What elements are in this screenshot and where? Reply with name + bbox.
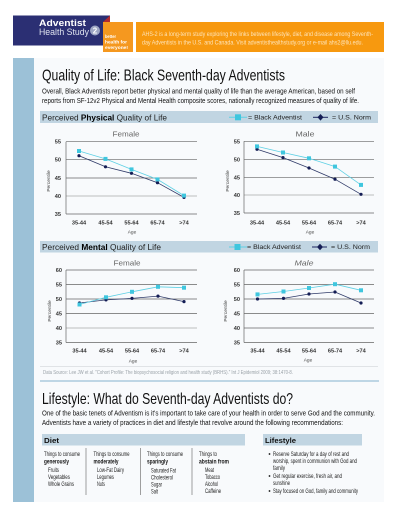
line chart: physical male: >74	[356, 220, 367, 226]
logo: Adventist Health Study 2: Health Study	[39, 27, 89, 37]
diet column: sparingly: Saturated Fat	[151, 468, 176, 474]
line chart: mental male: >74	[356, 348, 367, 354]
logo: Adventist Health Study 2: 2	[93, 26, 98, 36]
diet column: moderately: Things to consume	[94, 451, 130, 458]
line chart: physical male: 45-54	[276, 220, 291, 226]
line chart: physical male: Percentile	[225, 170, 231, 192]
line chart: mental female: 35-44	[72, 348, 88, 354]
line chart: mental female: Percentile	[47, 300, 53, 322]
line chart: mental female: 60	[56, 268, 62, 274]
section band: perceived physical quality of life: = U.S. Norm	[332, 116, 371, 122]
logo: Adventist Health Study 2: better	[105, 34, 116, 39]
section band: perceived physical quality of life: Perceived Physical Quality of Life	[42, 114, 168, 122]
line chart: physical female: >74	[179, 220, 190, 226]
diet column: abstain: Alcohol	[205, 481, 218, 488]
line chart: physical female: Age	[128, 230, 137, 236]
line chart: physical male: 55	[234, 139, 240, 145]
panel: lifestyle: Lifestyle	[265, 436, 296, 445]
source note: Data Source: Lee JW et al. "Cohort Profile: The biopsychosocial religion and health study (BRHS)." Int J Epidemiol 2009; 38:1470-8.	[43, 370, 293, 376]
line chart: mental female: Age	[129, 358, 138, 364]
line chart: mental male: 40	[234, 326, 240, 332]
intro text: lifestyle: Adventists have a variety of practices in diet and lifestyle that revolve around the following recommendations:	[42, 418, 343, 427]
panel: lifestyle: worship, spent in communion with God and	[272, 458, 357, 465]
diet column: moderately: Low-Fat Dairy	[97, 467, 125, 474]
line chart: mental female: 55-64	[125, 348, 140, 354]
title: Quality of Life: Quality of Life: Black Seventh-day Adventists	[42, 68, 285, 84]
line chart: mental female: 40	[56, 326, 62, 332]
line chart: mental male: 65-74	[328, 348, 343, 354]
diet column: sparingly	[147, 451, 183, 496]
line chart: physical male: 35	[234, 211, 240, 217]
line chart: physical female: 45	[55, 176, 61, 182]
diet column: abstain: Things to	[199, 451, 217, 458]
section band: perceived mental quality of life	[40, 241, 378, 252]
diet column: abstain: Tobacco	[205, 474, 220, 481]
diet column: moderately	[94, 451, 130, 488]
diet column: moderately: moderately	[94, 458, 119, 466]
line chart: physical male: 40	[234, 193, 240, 199]
line chart: physical male: 55-64	[302, 220, 317, 226]
intro text: quality of life	[42, 86, 359, 105]
header banner: study description: day Adventists in the U.S. and Canada. Visit adventisthealthstudy.org or e-mail ahs2@llu.edu.	[142, 40, 363, 46]
line chart: mental male: 45	[234, 312, 240, 318]
line chart: mental male: 55-64	[302, 348, 317, 354]
panel: lifestyle: Stay focused on God, family and community	[273, 488, 359, 495]
line chart: mental male: 55	[234, 282, 240, 288]
line chart: mental male: Percentile	[223, 300, 229, 322]
line chart: physical male: Age	[306, 230, 315, 236]
line chart: mental female: 55	[56, 282, 62, 288]
section band: perceived physical quality of life	[40, 111, 378, 123]
diet column: generously	[44, 451, 80, 488]
line chart: mental female: 50	[56, 297, 62, 303]
logo: Adventist Health Study 2	[13, 16, 133, 52]
logo: Adventist Health Study 2: health for	[105, 40, 127, 44]
diet column: moderately: Legumes	[97, 474, 114, 481]
line chart: mental male: 35	[234, 340, 240, 346]
diet column: abstain: abstain from	[199, 458, 229, 466]
line chart: mental female: 45-54	[99, 348, 114, 354]
diet column: sparingly: Salt	[151, 488, 158, 496]
panel: lifestyle: family	[273, 465, 286, 472]
panel: diet	[42, 434, 245, 496]
line chart: physical female: 35-44	[72, 220, 87, 226]
panel: lifestyle: Get regular exercise, fresh air, and	[273, 473, 342, 480]
line chart: physical female: 45-54	[98, 220, 114, 226]
side bar	[13, 58, 34, 502]
title: Lifestyle: Lifestyle: What do Seventh-day Adventists do?	[42, 391, 293, 408]
line chart: physical female	[46, 130, 197, 236]
line chart: physical female: 50	[55, 157, 61, 163]
line chart: physical male: Male	[296, 130, 314, 138]
diet column: generously: Vegetables	[48, 474, 70, 481]
line chart: physical female: Percentile	[46, 170, 52, 192]
diet column: abstain: Caffeine	[205, 488, 221, 495]
diet column: generously: generously	[44, 458, 69, 466]
header banner: study description	[136, 22, 384, 52]
panel: lifestyle: Reserve Saturday for a day of rest and	[273, 451, 349, 458]
diet column: generously: Things to consume	[44, 451, 80, 458]
line chart: physical female: 65-74	[150, 220, 166, 226]
line chart: physical male: 65-74	[328, 220, 343, 226]
line chart: mental male: Male	[294, 258, 314, 268]
diet column: sparingly: Sugar	[151, 482, 163, 488]
logo: Adventist Health Study 2: Adventist	[39, 18, 86, 28]
line chart: physical male: 50	[234, 157, 240, 163]
panel: lifestyle: sunshine	[273, 480, 290, 487]
line chart: mental male: 50	[234, 297, 240, 303]
line chart: mental male: 60	[234, 268, 240, 274]
line chart: mental female: 35	[56, 340, 62, 346]
line chart: mental female: >74	[179, 348, 190, 354]
line chart: mental male: 45-54	[276, 348, 292, 354]
diet column: abstain	[199, 451, 229, 495]
logo: Adventist Health Study 2: everyone!	[105, 45, 129, 50]
line chart: mental male	[223, 258, 374, 364]
section band: perceived mental quality of life: Perceived Mental Quality of Life	[42, 243, 162, 252]
line chart: mental male: 35-44	[250, 348, 266, 354]
panel: diet: Diet	[44, 436, 60, 445]
diet column: abstain: Meat	[205, 467, 214, 474]
diet column: sparingly: Things to consume	[147, 451, 183, 458]
section band: perceived mental quality of life: = Black Adventist	[247, 245, 301, 251]
diet column: sparingly: sparingly	[147, 458, 168, 466]
line chart: physical male: 45	[234, 175, 240, 181]
line chart: physical female: 55	[55, 140, 61, 146]
line chart: physical female: 40	[55, 194, 61, 200]
line chart: physical male	[225, 130, 374, 236]
intro text: lifestyle	[42, 408, 375, 427]
line chart: physical male: 35-44	[250, 220, 265, 226]
line chart: physical female: Female	[112, 130, 140, 138]
panel: lifestyle	[263, 434, 362, 495]
diet column: moderately: Nuts	[97, 481, 105, 488]
section band: perceived mental quality of life: = U.S. Norm	[331, 245, 370, 251]
line chart: mental female: 45	[56, 312, 62, 318]
line chart: mental female: 65-74	[151, 348, 166, 354]
diet column: generously: Whole Grains	[48, 481, 74, 488]
diet column: sparingly: Cholesterol	[151, 474, 173, 482]
line chart: mental female: Female	[114, 258, 140, 268]
line chart: physical female: 55-64	[124, 220, 140, 226]
diet column: generously: Fruits	[48, 467, 59, 474]
line chart: physical female: 35	[55, 212, 61, 218]
section band: perceived physical quality of life: = Black Adventist	[248, 116, 302, 122]
line chart: mental female	[47, 258, 197, 364]
line chart: mental male: Age	[304, 358, 313, 364]
content panel background	[34, 58, 384, 502]
